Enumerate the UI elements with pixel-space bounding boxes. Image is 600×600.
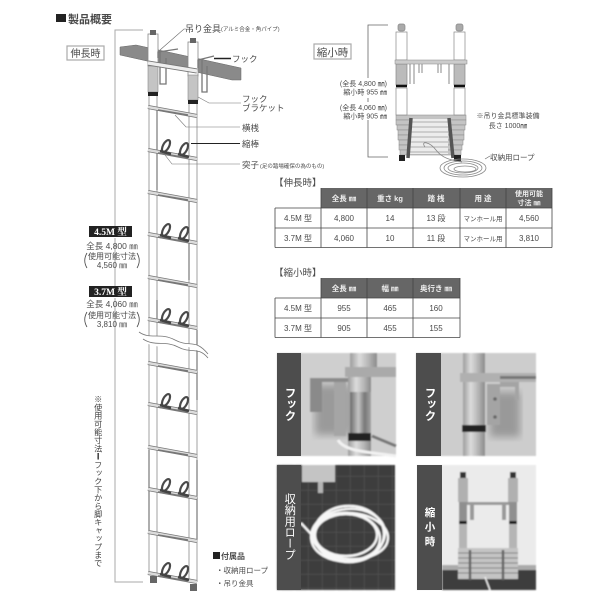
table values: 4,060 [334,234,355,243]
rungs [148,107,197,582]
table values: 465 [383,304,397,313]
header row [321,278,460,298]
model label: 4.5M: 4.5M 型 [94,226,127,238]
model label: 3.7M: 3,810 ㎜ [97,320,127,329]
header row: 重さ kg [377,193,403,203]
foot caps [150,576,197,591]
break mark [139,332,208,360]
table values: 160 [429,304,443,313]
table heading: 【縮小時】 [274,267,322,279]
heading: product overview [56,12,112,26]
header row: 用 途 [474,193,492,203]
callout: telescopic rod [191,139,260,149]
table heading: 【伸長時】 [274,177,322,189]
callout: hanger: 吊り金具 [185,23,221,34]
header row: 寸法 ㎜ [518,198,540,207]
model label: 4.5M: 4,560 ㎜ [97,261,127,270]
label: extended state [67,46,104,60]
heading: product overview: 製品概要 [68,12,112,26]
dimension: contracted height: (全長 4,800 ㎜) [340,79,387,88]
callout: hanger [160,23,280,50]
note: hanger included [476,111,540,130]
beam [120,45,241,80]
dimension: contracted height: 縮小時 905 ㎜ [343,112,387,120]
table grid [275,278,460,338]
photo tab label: contracted: 縮小時 [424,507,436,550]
table values: 11 段 [427,234,445,243]
accessories list: ・収納用ロープ [216,565,269,575]
upper rails [396,24,465,115]
table values [284,304,443,333]
photo tab label: hook 1: フック [284,387,296,422]
photo: hook close-up 2 [416,353,536,456]
note: hanger included: 長さ 1000㎜ [489,122,527,130]
model label: 3.7M: 使用可能寸法 [88,310,136,320]
model label: 4.5M: 全長 4,800 ㎜ [86,241,138,251]
label: extended state: 伸長時 [70,48,100,60]
callout: hook: フック [232,54,258,64]
callout: storage rope: 収納用ロープ [490,152,535,162]
callout: hook [214,54,258,64]
table values: 155 [429,324,443,333]
header row: 幅 ㎜ [381,283,399,293]
photo: storage rope [277,465,395,590]
callout: hook bracket [198,94,285,113]
photo tab label: storage rope: 収納用ロープ [283,493,295,560]
table values: マンホール用 [464,235,502,243]
callout: crossbar [175,115,260,133]
table values [284,214,540,243]
header row: 使用可能 [515,189,543,198]
header row: 全長 ㎜ [332,193,357,203]
table grid [275,188,552,248]
table values: 905 [337,324,351,333]
photo tab label: hook 2: フック [424,387,436,422]
table values: 3.7M 型 [284,324,312,333]
callout: hook bracket: フック [242,94,268,104]
top cross rung [148,63,197,71]
note: usable dimension (vertical text): ※使用可能寸法 ー フック下から脚キャップまで [93,395,102,567]
model label: 4.5M [85,226,139,270]
feet [399,155,405,161]
coiled rope [424,143,486,177]
callouts: ladder parts [160,23,324,170]
diagram: extended ladder [120,30,241,591]
label: contracted state: 縮小時 [317,46,349,59]
callout: crossbar: 横桟 [242,123,260,133]
dimension line: ladder height [115,30,143,582]
accessories list [213,551,269,588]
table values: 4.5M 型 [284,304,312,313]
rung step clips [160,139,190,580]
brackets and straps [410,64,449,84]
stacked rungs [396,115,466,155]
callout: protrusion: 突子 [242,160,260,170]
accessories list: ・吊り金具 [216,578,254,588]
table values: 3,810 [519,234,540,243]
table values: 4,560 [519,214,540,223]
table values: 4.5M 型 [284,214,312,223]
table values: 955 [337,304,351,313]
callout: hanger: (アルミ合金・角パイプ) [221,25,280,33]
callout: protrusion [165,155,324,170]
accessories list: 付属品 [221,551,245,561]
table values: 10 [386,234,395,243]
table values: 14 [386,214,395,223]
photo: contracted ladder [417,465,536,590]
table: contracted [274,267,460,338]
dimension: contracted height: (全長 4,060 ㎜) [340,103,387,112]
note: hanger included: ※吊り金具標準装備 [476,111,540,120]
dimension: contracted height [340,25,388,157]
hook brackets [158,49,214,92]
table values: 3.7M 型 [284,234,312,243]
table values: 4,800 [334,214,355,223]
photo: hook close-up 1 [277,353,396,456]
model label: 3.7M: 3.7M 型 [94,286,127,298]
photo tab backgrounds [277,353,442,590]
table values: マンホール用 [464,215,502,223]
table values: 13 段 [426,214,446,223]
model label: 3.7M [85,286,139,329]
callout: hook bracket: ブラケット [242,103,285,113]
table: extended [274,177,552,248]
ladder rails [148,30,198,582]
model label: 3.7M: 全長 4,060 ㎜ [86,299,138,309]
header row: 奥行き ㎜ [420,283,453,293]
header row [321,188,552,208]
callout: protrusion: (足の踏場確保の為のもの) [260,162,324,170]
header row: 踏 桟 [427,193,445,203]
model label: 4.5M: 使用可能寸法 [88,251,136,261]
diagram: contracted ladder [395,24,486,177]
label: contracted state [314,44,351,59]
header row: 全長 ㎜ [332,283,357,293]
table values: 455 [383,324,397,333]
callout: telescopic rod: 縮棒 [242,139,260,149]
dimension: contracted height: 縮小時 955 ㎜ [343,88,387,96]
